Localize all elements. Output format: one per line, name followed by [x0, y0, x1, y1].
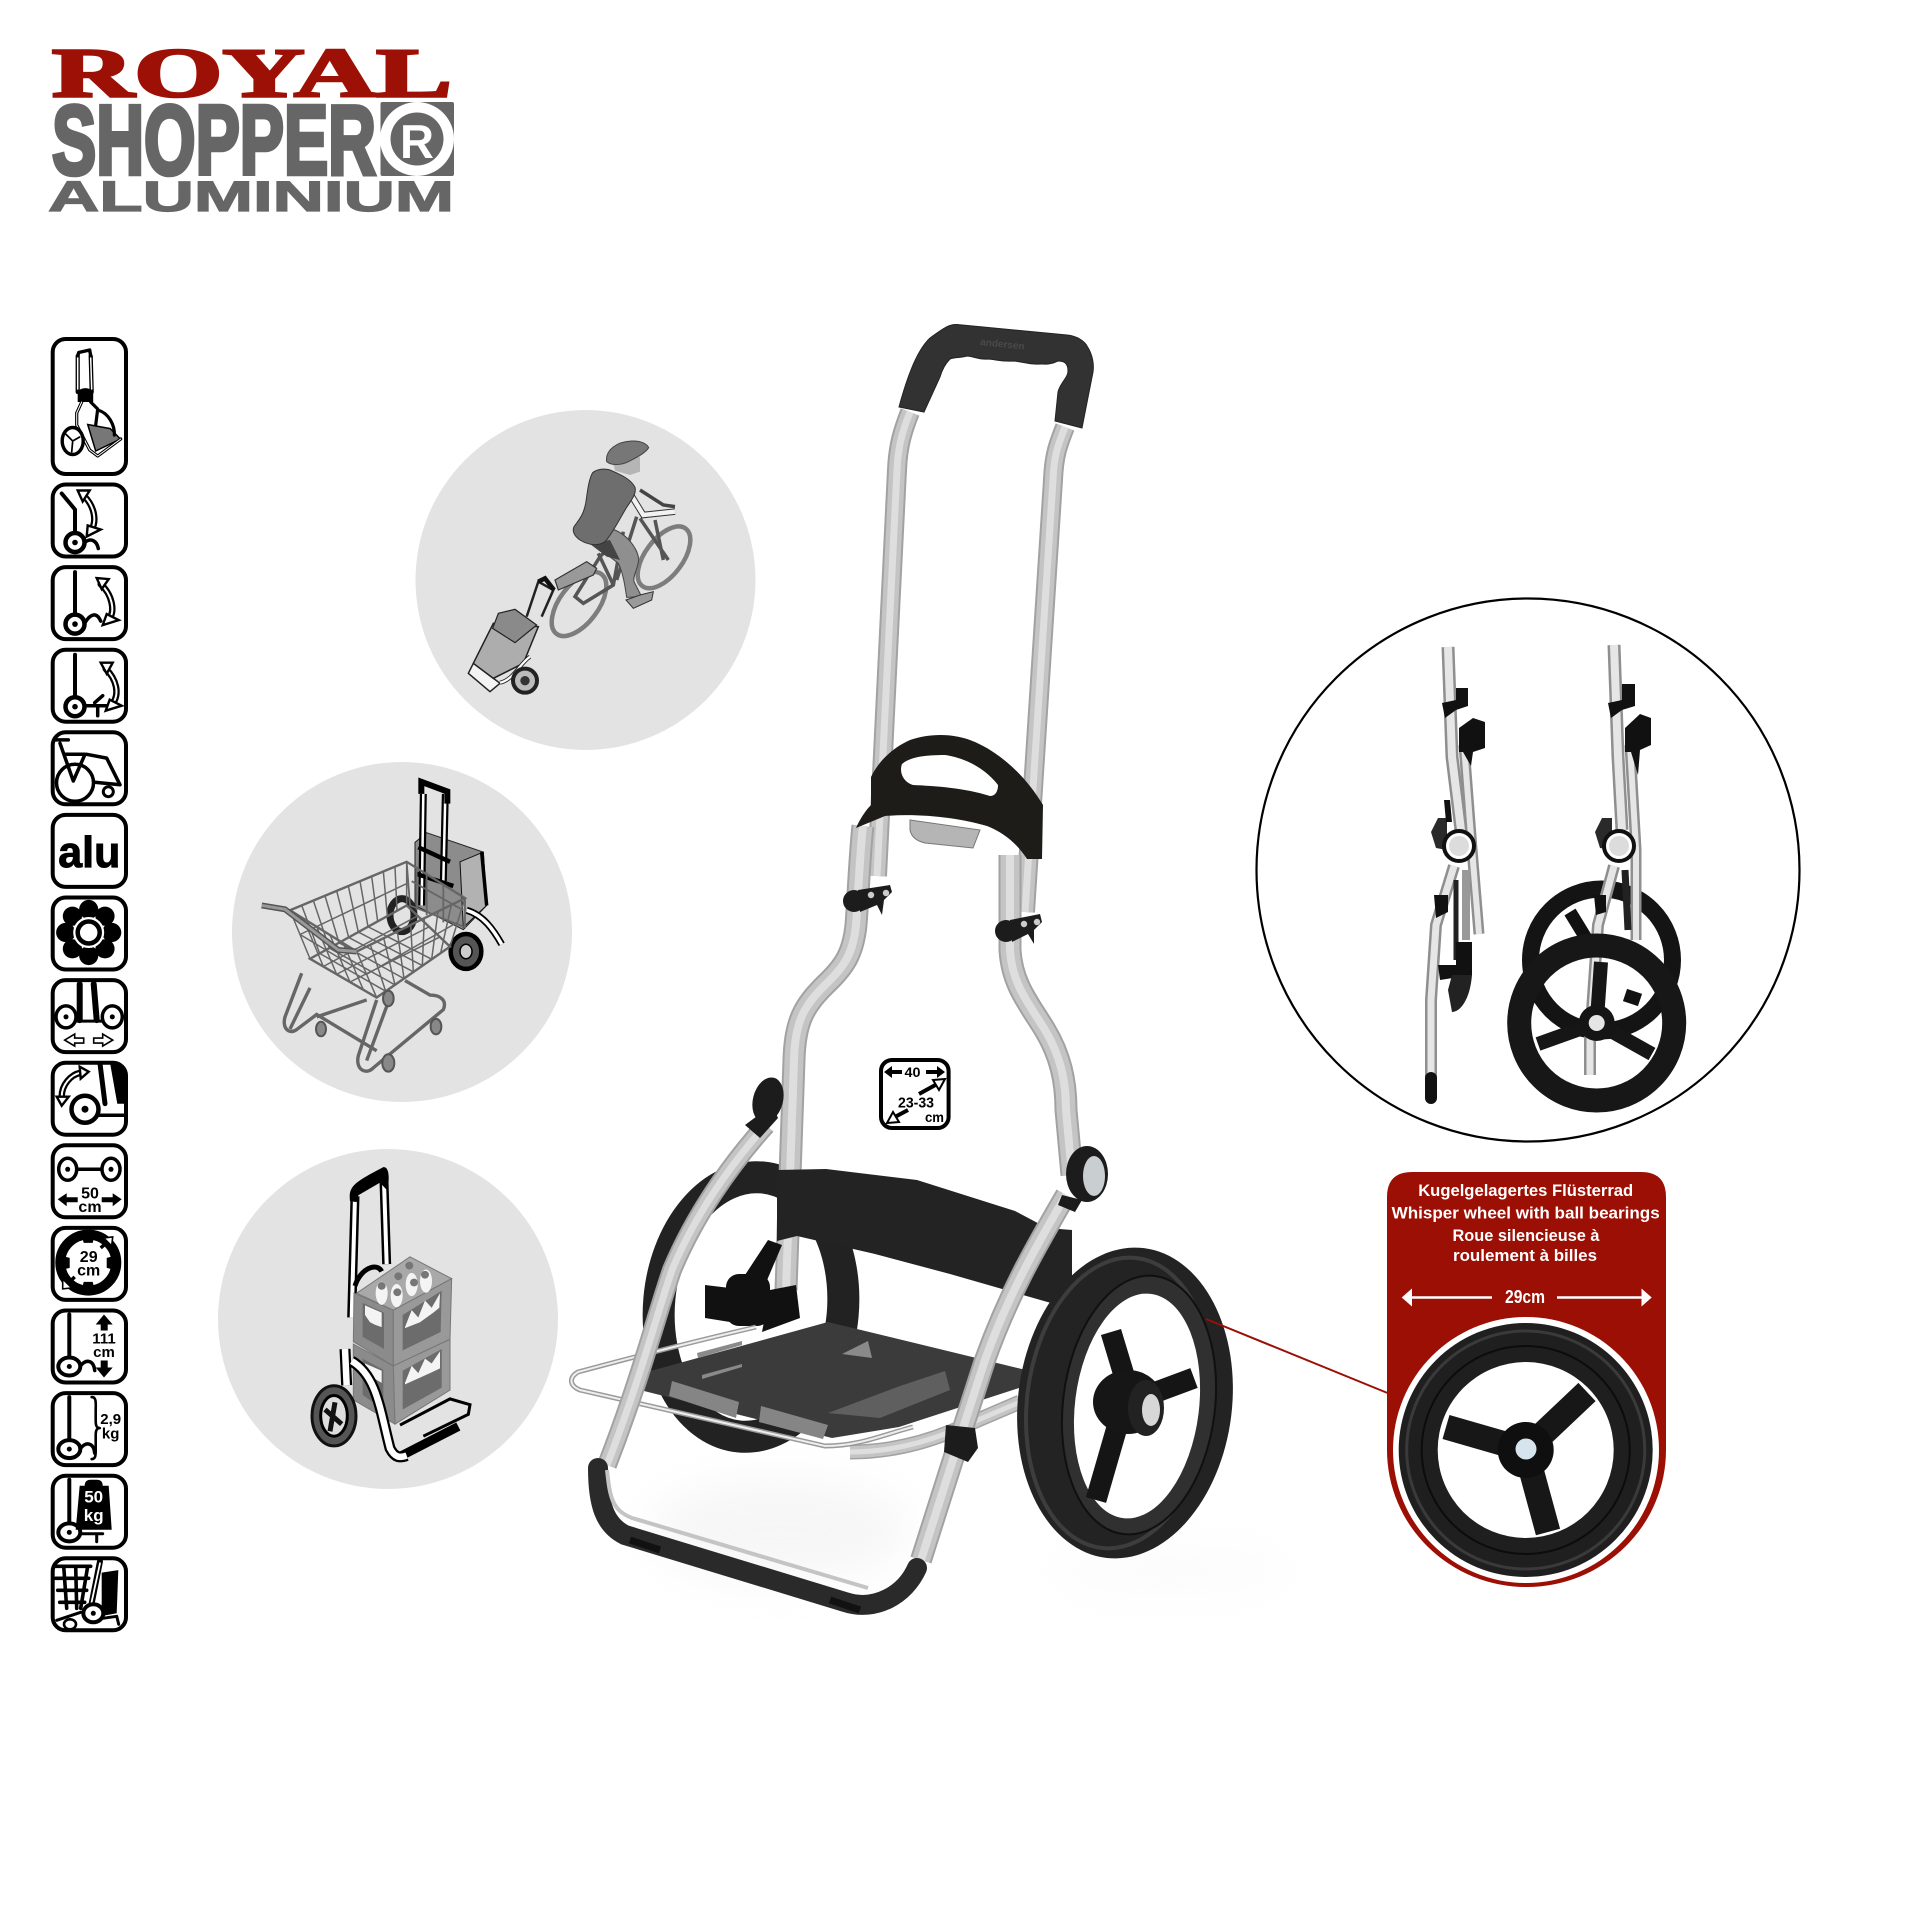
icon: 2.9 kg weight: 2,9	[100, 1411, 121, 1428]
clamp right	[995, 914, 1042, 944]
grip brand mark: andersen	[980, 337, 1025, 353]
soft floor shadow	[650, 1480, 1290, 1590]
folded trolley side view	[1431, 647, 1485, 1098]
clamp left	[843, 885, 892, 915]
connector line to wheel callout	[1206, 1319, 1390, 1394]
icon: 111 cm height: 111	[92, 1330, 116, 1348]
red callout panel	[1387, 1172, 1666, 1587]
icon: 50 cm track	[53, 1145, 126, 1217]
callout text French line two: roulement à billes	[1453, 1246, 1597, 1265]
front frame tubes	[607, 1125, 1066, 1560]
logo registered mark: R	[400, 115, 434, 168]
icon: bicycle trailer	[53, 732, 126, 804]
diameter arrow left	[1402, 1288, 1492, 1306]
icon: 29 cm wheel	[53, 1228, 126, 1300]
main product photo: aluminium trolley	[571, 324, 1250, 1610]
trolley frame and wheel	[400, 1399, 470, 1436]
circle: fits supermarket cart	[232, 762, 572, 1102]
folded trolley front view with wheels	[1519, 645, 1674, 1100]
circle: crates of bottles	[218, 1149, 558, 1489]
back plate	[777, 1169, 1072, 1303]
seat bracket	[944, 1425, 978, 1462]
icon column: product features	[53, 339, 127, 1630]
circle: cycling with trailer	[416, 410, 756, 750]
axle block	[705, 1240, 800, 1332]
icon: fits supermarket cart	[53, 1558, 126, 1630]
icon: frame fold	[53, 567, 126, 639]
rear wheel	[648, 1169, 854, 1445]
inset icon: 40 by 23-33 cm dimensions: 23-33	[898, 1094, 934, 1112]
diameter label: 29cm	[1505, 1287, 1545, 1307]
cart base	[284, 973, 444, 1071]
diameter arrow right	[1557, 1288, 1652, 1306]
hinge knob left	[745, 1074, 788, 1138]
front wheel	[1000, 1235, 1250, 1571]
illustration: trolley carrying crates	[312, 1167, 470, 1457]
wheel photo	[1393, 1317, 1659, 1583]
logo word: SHOPPER: SHOPPER	[52, 85, 376, 195]
foot plate mesh	[636, 1322, 1026, 1439]
icon: 2.9 kg weight	[53, 1393, 126, 1465]
icon: 29 cm wheel: cm	[77, 1262, 100, 1279]
logo: Royal Shopper Aluminium	[48, 36, 454, 221]
logo word: ALUMINIUM: ALUMINIUM	[48, 173, 454, 221]
front wire rail	[571, 1327, 913, 1446]
icon: 50 kg capacity	[53, 1476, 126, 1548]
upper telescopic tubes	[877, 412, 1065, 912]
callout text French line one: Roue silencieuse à	[1452, 1226, 1600, 1245]
middle carry handle	[856, 735, 1043, 859]
foot bar	[598, 1468, 917, 1610]
front wheel of folded trolley	[1519, 946, 1674, 1100]
inset icon: 40 by 23-33 cm dimensions	[881, 1060, 949, 1128]
icon: 2.9 kg weight: kg	[102, 1426, 119, 1443]
icon: 50 kg capacity: kg	[84, 1506, 104, 1525]
illustration: trolley in shopping cart	[262, 782, 502, 1072]
logo registered mark	[380, 102, 454, 176]
icon: aluminium: alu	[58, 828, 120, 877]
logo word: ROYAL: ROYAL	[52, 36, 452, 112]
circle: folded views	[1256, 598, 1800, 1142]
trailer trolley	[468, 663, 500, 692]
illustration: cyclist towing trolley	[468, 441, 701, 693]
icon: complete trolley	[53, 339, 126, 474]
icon: 50 kg capacity: 50	[84, 1488, 103, 1507]
trolley behind cart	[415, 833, 487, 930]
icon: foot plate fold	[53, 650, 126, 722]
seat cross tube	[850, 1402, 1020, 1452]
icon: 111 cm height: cm	[93, 1344, 115, 1361]
lower frame tubes	[786, 826, 1072, 1290]
bike wheels	[541, 517, 701, 645]
inset icon: 40 by 23-33 cm dimensions: cm	[925, 1109, 944, 1125]
inset icon: 40 by 23-33 cm dimensions: 40	[904, 1064, 921, 1080]
callout: whisper wheel	[1387, 1172, 1666, 1587]
icon: 29 cm wheel: 29	[80, 1249, 98, 1266]
callout text German: Kugelgelagertes Flüsterrad	[1418, 1181, 1633, 1200]
hinge knob right	[1058, 1146, 1108, 1212]
icon: 50 cm track: cm	[78, 1199, 102, 1216]
wheel spokes and hub	[1096, 1332, 1194, 1500]
handle grip	[899, 324, 1093, 428]
icon: 111 cm height	[53, 1310, 126, 1382]
icon: ball bearing	[53, 898, 126, 970]
crate panels and bottles	[363, 1291, 442, 1410]
icon: 50 cm track: 50	[81, 1185, 99, 1202]
cart basket	[290, 862, 465, 998]
icon: adjustable track width	[53, 980, 126, 1052]
icon: aluminium	[53, 815, 126, 887]
callout text English: Whisper wheel with ball bearings	[1392, 1204, 1660, 1222]
silver latch under middle handle	[910, 820, 980, 848]
icon: wheel turns	[53, 1063, 127, 1135]
icon: handle fold	[53, 484, 126, 556]
